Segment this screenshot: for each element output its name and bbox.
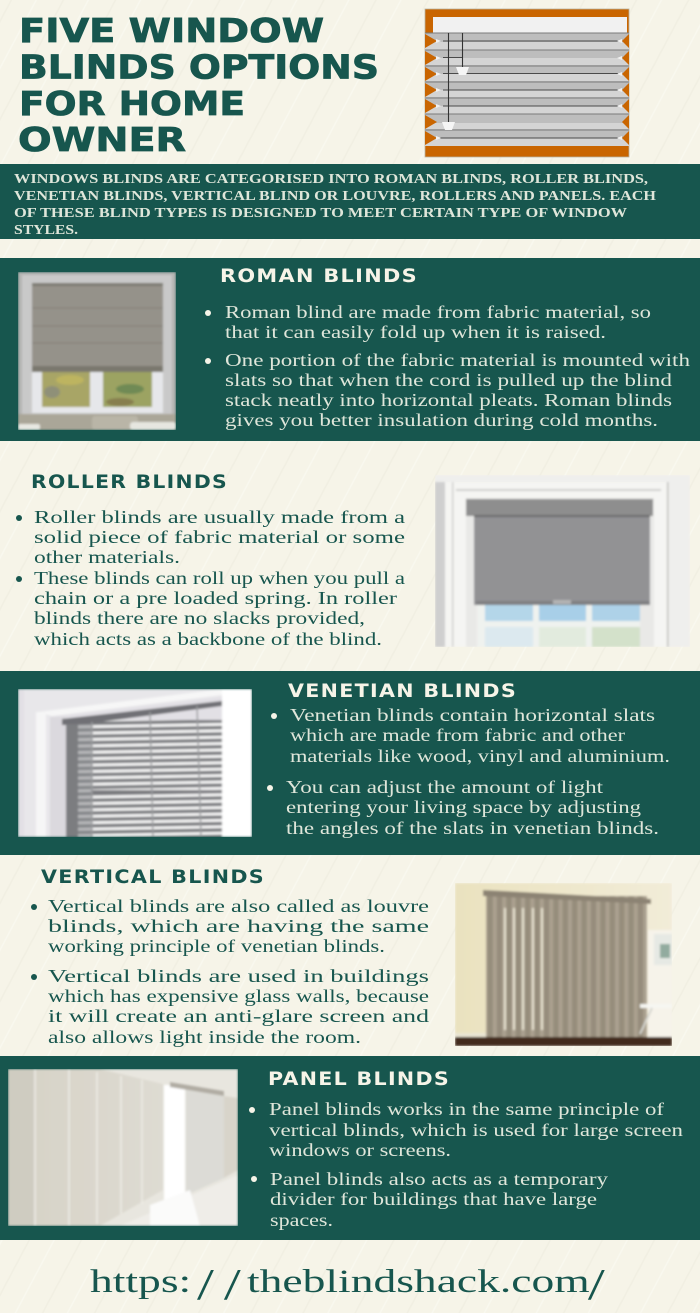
bullet list: panel blinds: spaces. <box>270 1210 333 1230</box>
intro text: WINDOWS BLINDS ARE CATEGORISED INTO ROMAN BLINDS, ROLLER BLINDS, <box>14 172 648 187</box>
bullet list: venetian blinds <box>267 705 670 838</box>
title: FIVE WINDOW <box>19 11 324 50</box>
intro text: VENETIAN BLINDS, VERTICAL BLIND OR LOUVRE, ROLLERS AND PANELS. EACH <box>14 189 656 204</box>
panel: venetian blinds <box>0 671 700 855</box>
panel: intro band <box>0 164 700 239</box>
bullet list: vertical blinds: it will create an anti-glare screen and <box>48 1006 429 1026</box>
bullet list: roman blinds: that it can easily fold up when it is raised. <box>225 322 606 342</box>
bullet list: roller blinds: chain or a pre loaded spring. In roller <box>34 588 397 608</box>
footer url: / <box>224 1261 241 1309</box>
bullet list: roman blinds: slats so that when the cord is pulled up the blind <box>225 370 672 390</box>
bullet list: vertical blinds: also allows light inside the room. <box>48 1027 361 1047</box>
bullet list: roller blinds: Roller blinds are usually made from a <box>34 507 405 527</box>
footer url: / <box>588 1261 605 1309</box>
heading: panel blinds: PANEL BLINDS <box>268 1068 450 1090</box>
heading: roman blinds: ROMAN BLINDS <box>220 265 418 287</box>
bullet list: roman blinds: stack neatly into horizontal pleats. Roman blinds <box>225 390 672 410</box>
bullet list: roman blinds <box>205 302 690 430</box>
bullet list: roller blinds: These blinds can roll up when you pull a <box>34 568 405 588</box>
image: vertical blind <box>455 883 672 1046</box>
bullet list: panel blinds <box>249 1099 683 1230</box>
bullet list: venetian blinds: You can adjust the amount of light <box>286 777 603 797</box>
intro text <box>14 172 656 238</box>
bullet list: vertical blinds: working principle of venetian blinds. <box>48 936 385 956</box>
bullet list: vertical blinds: which has expensive glass walls, because <box>48 986 429 1006</box>
icon: venetian blind window illustration <box>425 9 629 157</box>
panel: panel blinds <box>0 1056 700 1240</box>
image: panel blind <box>8 1069 238 1226</box>
bullet list: panel blinds: windows or screens. <box>269 1140 451 1160</box>
bullet list: vertical blinds: blinds, which are having the same <box>48 916 429 936</box>
heading: vertical blinds: VERTICAL BLINDS <box>41 866 265 888</box>
bullet list: roller blinds: blinds there are no slacks provided, <box>34 608 365 628</box>
bullet list: panel blinds: vertical blinds, which is used for large screen <box>269 1120 683 1140</box>
bullet list: venetian blinds: the angles of the slats in venetian blinds. <box>286 818 659 838</box>
bullet list: venetian blinds: Venetian blinds contain horizontal slats <box>290 705 655 725</box>
image: roman blind <box>18 272 176 430</box>
title: FOR HOME <box>19 84 245 123</box>
footer url: https: <box>90 1263 191 1299</box>
panel: roman blinds <box>0 258 700 441</box>
footer url: / <box>197 1261 214 1309</box>
bullet list: roller blinds: solid piece of fabric material or some <box>34 527 405 547</box>
bullet list: roman blinds: One portion of the fabric material is mounted with <box>225 350 690 370</box>
bullet list: roman blinds: gives you better insulation during cold months. <box>225 410 658 430</box>
bullet list: panel blinds: Panel blinds also acts as a temporary <box>270 1169 608 1189</box>
bullet list: vertical blinds: Vertical blinds are also called as louvre <box>48 896 429 916</box>
bullet list: panel blinds: Panel blinds works in the same principle of <box>269 1099 664 1119</box>
bullet list: panel blinds: divider for buildings that have large <box>270 1189 597 1209</box>
image: roller blind <box>435 475 690 647</box>
bullet list: roller blinds: other materials. <box>34 547 180 567</box>
section: vertical blinds <box>31 866 672 1047</box>
heading: roller blinds: ROLLER BLINDS <box>31 471 228 493</box>
title: OWNER <box>18 120 186 159</box>
bullet list: vertical blinds: Vertical blinds are used in buildings <box>48 966 429 986</box>
heading: venetian blinds: VENETIAN BLINDS <box>288 680 517 702</box>
bullet list: venetian blinds: materials like wood, vinyl and aluminium. <box>290 746 670 766</box>
section: roller blinds <box>16 471 690 649</box>
bullet list: vertical blinds <box>31 896 429 1047</box>
intro text: STYLES. <box>14 223 78 238</box>
title <box>18 11 379 159</box>
bullet list: roman blinds: Roman blind are made from fabric material, so <box>225 302 651 322</box>
footer url: theblindshack.com <box>247 1263 590 1299</box>
bullet list: venetian blinds: which are made from fabric and other <box>290 725 625 745</box>
image: venetian blind <box>18 689 252 837</box>
bullet list: roller blinds <box>16 507 405 649</box>
bullet list: roller blinds: which acts as a backbone of the blind. <box>34 629 382 649</box>
bullet list: venetian blinds: entering your living space by adjusting <box>286 797 641 817</box>
title: BLINDS OPTIONS <box>19 48 379 86</box>
intro text: OF THESE BLIND TYPES IS DESIGNED TO MEET CERTAIN TYPE OF WINDOW <box>14 206 627 221</box>
